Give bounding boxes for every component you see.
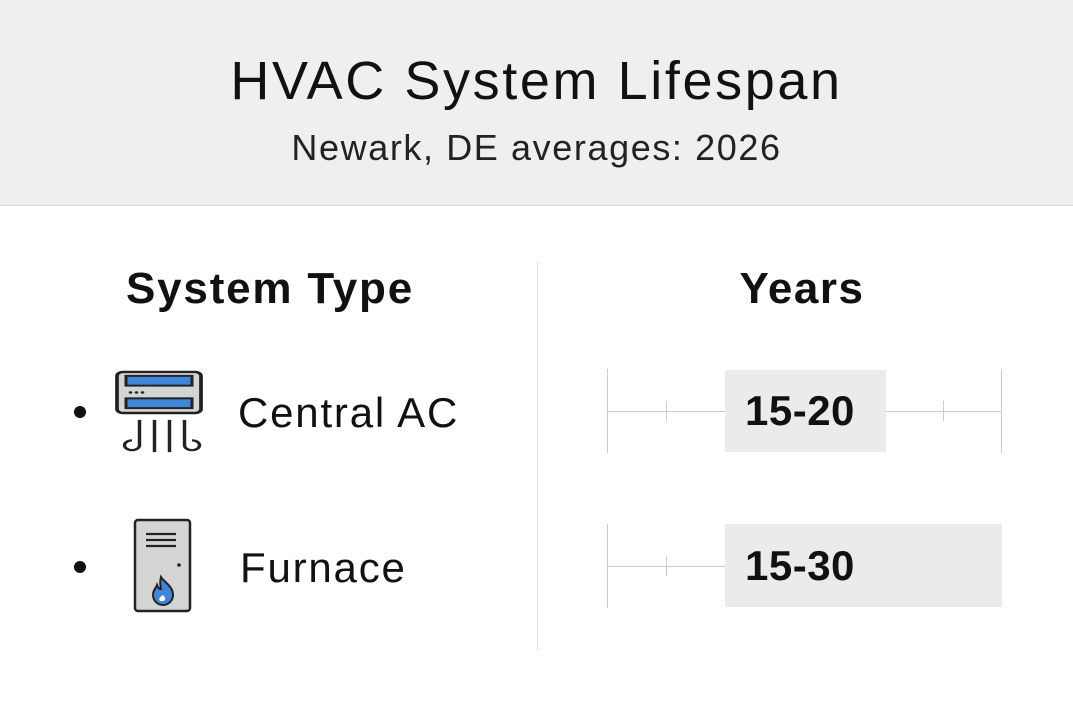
header band [0,0,1073,206]
subtitle: Newark, DE averages: 2026 [291,127,782,168]
row: furnace [74,518,407,612]
bullet [74,561,86,573]
column heading: years: Years [740,264,864,313]
icon: furnace [134,518,192,612]
bar value: 15-30 [745,542,855,589]
bar value: 15-20 [745,387,855,434]
label: Central AC [238,389,459,436]
bar value [725,524,1002,607]
bullet [74,406,86,418]
row: central AC [74,370,459,452]
title: HVAC System Lifespan [230,51,843,111]
icon: air conditioner [115,370,203,452]
label: Furnace [240,544,407,591]
bar value [725,370,886,452]
column heading: system type: System Type [126,264,414,313]
